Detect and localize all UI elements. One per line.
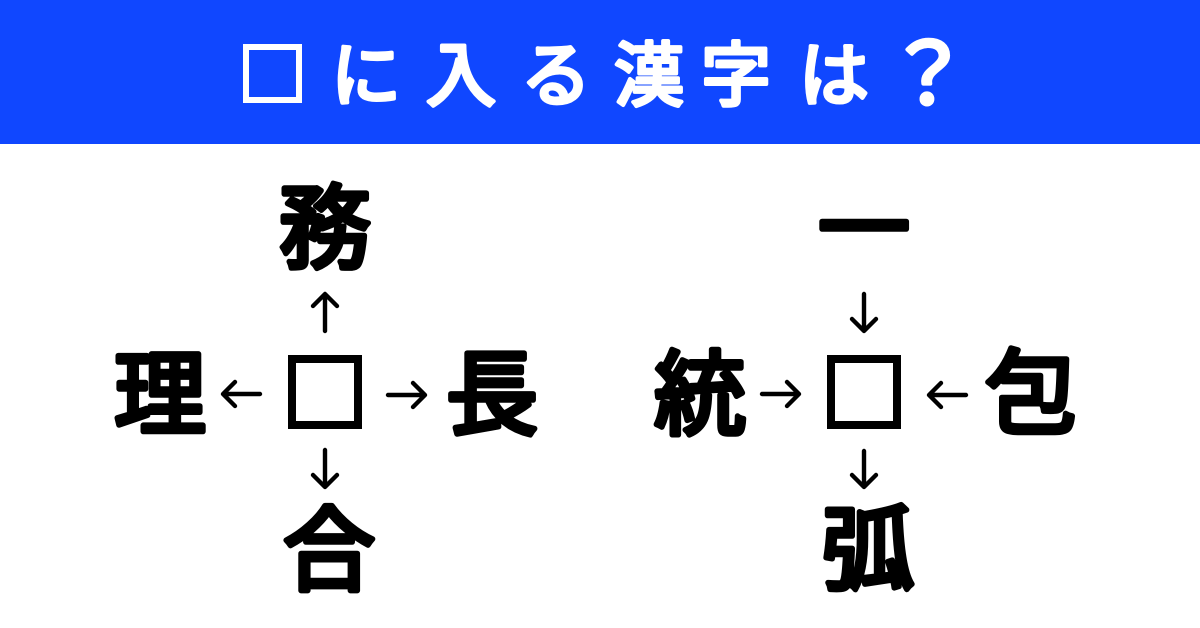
blank square (292, 359, 358, 425)
title: に (331, 37, 401, 115)
arrow: right (388, 383, 425, 407)
arrow: down bottom (852, 451, 876, 487)
kanji: right: 長 (446, 345, 538, 447)
title: 漢 (614, 37, 684, 115)
arrow: left (223, 382, 260, 406)
header band (0, 0, 1200, 144)
title: ？ (886, 28, 970, 122)
blank square (831, 359, 897, 425)
kanji: right: 包 (985, 344, 1077, 446)
title: 字 (701, 37, 771, 115)
arrow: left (929, 383, 966, 407)
puzzle: right (654, 179, 1077, 602)
kanji: left: 理 (114, 345, 206, 447)
title: は (799, 37, 869, 115)
arrow: up (313, 294, 337, 331)
kanji: top: 務 (279, 179, 371, 281)
arrow: down (313, 450, 337, 487)
kanji: bottom: 弧 (822, 500, 914, 602)
kanji: bottom: 合 (283, 501, 375, 603)
arrow: down top (852, 294, 876, 331)
puzzle: left (114, 179, 538, 603)
kanji: top: 一 (818, 179, 910, 281)
title: る (521, 37, 591, 115)
title: 入 (426, 37, 496, 115)
kanji: left: 統 (654, 345, 746, 447)
arrow: right (762, 382, 799, 406)
title (246, 28, 970, 122)
